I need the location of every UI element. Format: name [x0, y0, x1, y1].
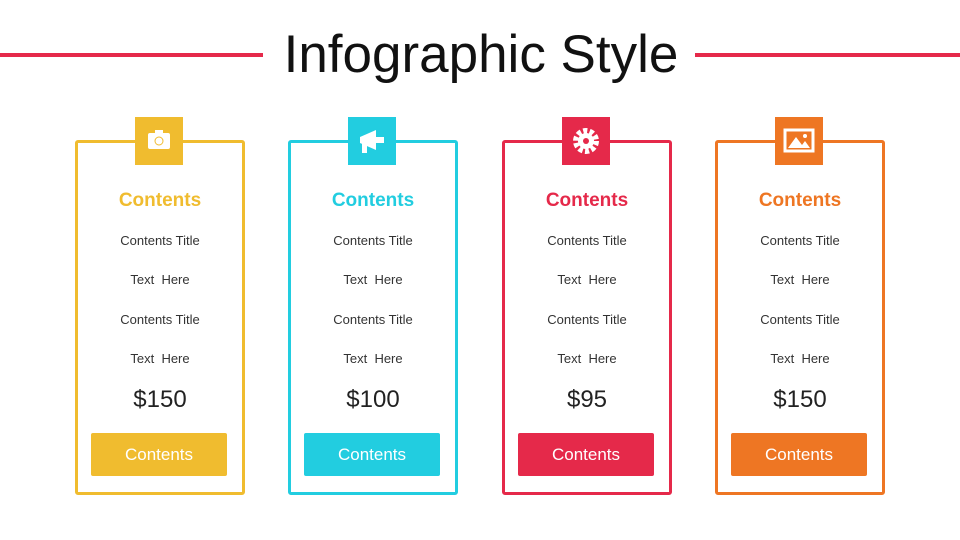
panel: red: $95 — [567, 386, 607, 413]
panel: red: Contents Title — [547, 312, 627, 327]
panel: red: Text Here — [557, 351, 617, 366]
button: Contents — [338, 445, 406, 464]
button: Contents — [552, 445, 620, 464]
button — [91, 433, 227, 476]
icon: camera — [135, 117, 183, 165]
icon: gear — [562, 117, 610, 165]
panel: orange: Contents Title — [760, 312, 840, 327]
title lines — [0, 53, 263, 57]
panel: teal: Contents Title — [333, 233, 413, 248]
panel: red: Text Here — [557, 272, 617, 287]
panel: orange: Text Here — [770, 351, 830, 366]
panel: yellow — [75, 117, 245, 495]
panel: red — [502, 117, 672, 495]
panel: teal: $100 — [346, 386, 400, 413]
button — [304, 433, 440, 476]
panel: yellow: Text Here — [130, 351, 190, 366]
button: Contents — [125, 445, 193, 464]
panel: red: Contents Title — [547, 233, 627, 248]
panel: orange: Text Here — [770, 272, 830, 287]
title: Infographic Style — [284, 25, 678, 84]
panel: yellow: $150 — [133, 386, 187, 413]
panel: teal: Text Here — [343, 272, 403, 287]
panel: red: Contents — [546, 190, 628, 211]
button — [518, 433, 654, 476]
button — [731, 433, 867, 476]
panel: yellow: Contents — [119, 190, 201, 211]
panel: yellow: Text Here — [130, 272, 190, 287]
panel: yellow: Contents Title — [120, 233, 200, 248]
button: Contents — [765, 445, 833, 464]
panel: yellow: Contents Title — [120, 312, 200, 327]
icon: picture — [775, 117, 823, 165]
panel: teal: Contents Title — [333, 312, 413, 327]
panel: teal: Contents — [332, 190, 414, 211]
panel: orange: $150 — [773, 386, 827, 413]
panel: orange: Contents Title — [760, 233, 840, 248]
panel: orange: Contents — [759, 190, 841, 211]
panel: teal: Text Here — [343, 351, 403, 366]
icon: megaphone — [348, 117, 396, 165]
panel: teal — [288, 117, 458, 495]
panel: orange — [715, 117, 885, 495]
